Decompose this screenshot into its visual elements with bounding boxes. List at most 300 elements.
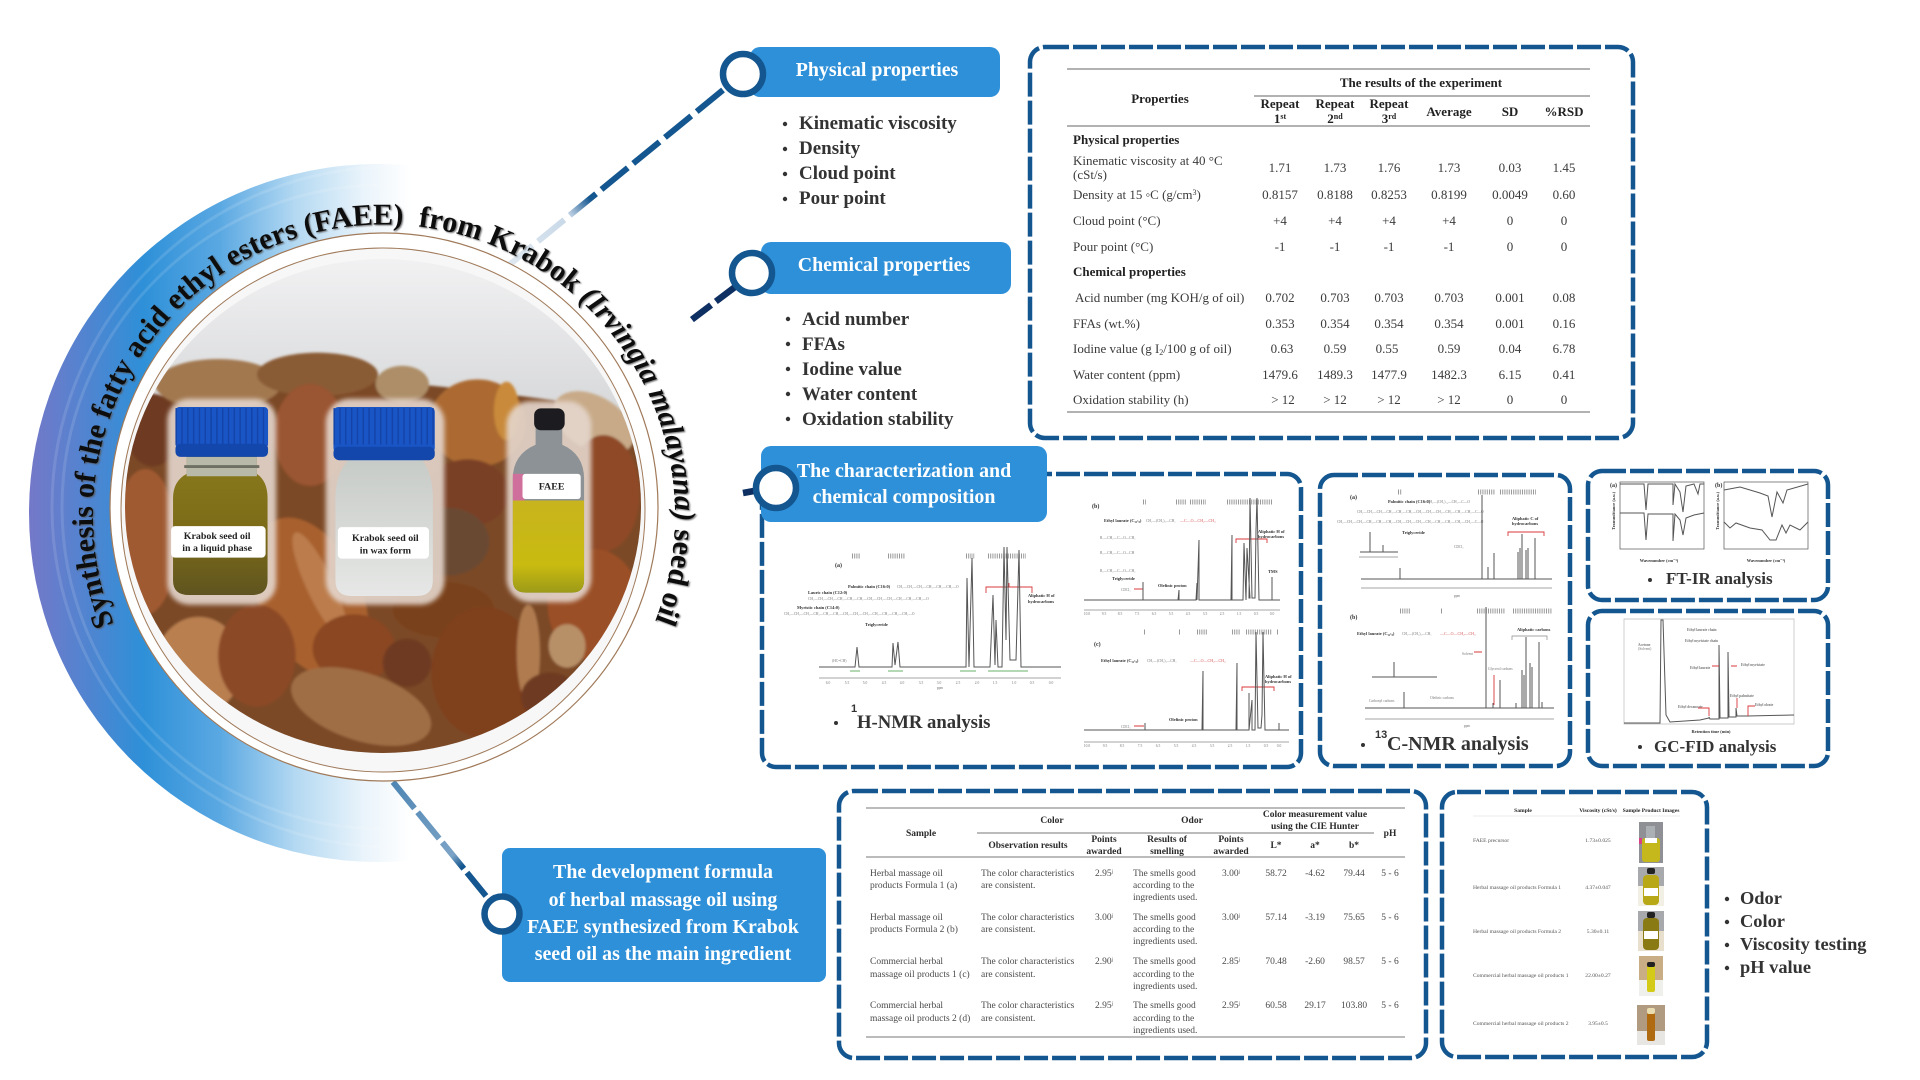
chart: 1H-NMR spectrum c: Olefinic proton [1169,717,1198,722]
chart: GC-FID chromatogram: Ethyl oleate [1755,703,1774,707]
chart: 1H-NMR spectrum c: 2.5 [1228,744,1232,748]
table: experiment results: 1.76 [1378,160,1401,175]
panel: 13C-NMR spectra [1320,475,1570,766]
chart: 1H-NMR spectrum a: CH₃—CH₂—CH₂—CH₂—CH₂—CH₂—CH₂—CH₂—CH₂—CH₂—CH₂—CH₂—O [808,597,929,601]
table: product evaluation: j [1111,958,1113,963]
table: experiment results: 0.354 [1434,316,1464,331]
table: experiment results: 0 [1507,213,1513,228]
table: experiment results: SD [1502,104,1518,119]
table: product evaluation: 3.00 [1222,913,1239,923]
curved title: Synthesis of the fatty acid ethyl esters (FAEE) from Krabok (Irvingia malayana) seed oil [72,204,698,630]
table: product evaluation: a* [1310,841,1320,851]
table: experiment results [1067,69,1590,412]
table: experiment results: /100 g of oil) [1163,341,1232,356]
list: physical properties: Kinematic viscosity [799,113,957,134]
panel: sensory and colour table [839,791,1426,1058]
table: experiment results: -1 [1330,239,1340,254]
table: experiment results: 0.55 [1376,341,1398,356]
table: product evaluation: 5 - 6 [1381,913,1399,923]
chart: GC-FID chromatogram: Ethyl myristate [1741,663,1765,667]
table: experiment results: 0.8199 [1431,187,1467,202]
chart: 1H-NMR spectrum c: 3.5 [1210,744,1214,748]
chart: 13C-NMR spectrum a: hydrocarbons [1512,521,1538,526]
table: product evaluation: 5 - 6 [1381,869,1399,879]
text: GC-FID label: GC-FID analysis [1654,737,1777,756]
table: viscosity: Herbal massage oil products Formula 2 [1473,929,1561,935]
table: product evaluation: massage oil products 1 (c) [870,969,970,980]
chart: 1H-NMR spectrum a [784,547,1061,690]
list: product tests: Viscosity testing [1740,934,1867,954]
table: experiment results: 3 [1192,188,1196,197]
chart: 13C-NMR spectrum b: (b) [1350,614,1357,621]
table: product evaluation: ingredients used. [1133,982,1197,992]
jar: wax seed oil: in wax form [360,545,412,556]
photo: krabok seeds and three bottles [125,273,641,753]
list: physical properties: Cloud point [799,163,896,184]
table: product evaluation: The color characteristics [981,1001,1075,1011]
panel: FT-IR [1588,471,1828,600]
table: product evaluation: massage oil products 2 (d) [870,1013,970,1024]
chart: 1H-NMR spectrum a: Triglyceride [865,622,888,627]
table: experiment results: Cloud point (°C) [1073,213,1161,228]
chart: 13C-NMR spectrum b: ppm [1464,724,1470,728]
table: experiment results: %RSD [1544,104,1584,119]
panel: massage oil formula heading: seed oil as the main ingredient [535,943,792,965]
table: experiment results: (cSt/s) [1073,167,1107,182]
table: product evaluation: The color characteristics [981,957,1075,967]
table: product evaluation: 60.58 [1265,1001,1287,1011]
table: product evaluation: The color characteristics [981,913,1075,923]
chart: 1H-NMR spectrum c: CH₃—(CH₂)₉—CH₂ [1147,659,1177,663]
table: experiment results: Physical properties [1073,132,1179,147]
chart: 1H-NMR spectrum b: R₁—CH₂—C—O—CH₂ [1100,536,1136,540]
list: product tests: Odor [1740,888,1782,908]
table: product evaluation [866,808,1405,1037]
chart: 13C-NMR spectrum b [1350,607,1554,728]
table: experiment results: Average [1426,104,1472,119]
table: product evaluation: 5 - 6 [1381,1001,1399,1011]
chart: 13C-NMR spectrum b: Glycerol carbons [1488,667,1513,671]
panel: physical properties heading [723,47,1000,97]
table: experiment results: nd [1334,112,1343,121]
chart: 13C-NMR spectrum b: —C—O—CH₂—CH₃ [1439,631,1476,636]
table: experiment results: The results of the experiment [1340,75,1503,90]
chart: GC-FID chromatogram: Ethyl laurate chain [1687,628,1717,632]
table: product evaluation: ingredients used. [1133,893,1197,903]
icon: ring marker [484,896,520,932]
table: viscosity: 4.37±0.047 [1585,885,1611,891]
connector: to massage oil formula [393,782,486,896]
chart: 1H-NMR spectrum a: 4.0 [900,681,904,685]
table: experiment results: 0.353 [1265,316,1295,331]
table: experiment results: 0 [1507,239,1513,254]
table: product evaluation: according to the [1133,881,1194,891]
chart: 1H-NMR spectrum a: Lauric chain (C12:0) [808,590,848,595]
images: sample bottles [1637,822,1665,1045]
chart: 13C-NMR spectrum a: CH₃—CH₂—CH₂—CH₂—CH₂—CH₂—CH₂—CH₂—CH₂—CH₂—CH₂—CH₂—C—O [1357,510,1484,514]
table: experiment results: Iodine value (g I [1073,341,1159,356]
table: experiment results: FFAs (wt.%) [1073,316,1140,331]
jar: liquid seed oil: in a liquid phase [182,543,253,554]
chart: 1H-NMR spectrum a: 6.0 [826,681,830,685]
table: viscosity: 3.95±0.5 [1588,1021,1608,1027]
list: chemical properties: FFAs [802,334,845,355]
chart: 1H-NMR spectrum c: 10.0 [1084,744,1090,748]
table: product evaluation: Color [1040,816,1064,826]
chart: 13C-NMR spectrum a [1337,492,1552,598]
table: product evaluation: 5 - 6 [1381,957,1399,967]
table: experiment results: +4 [1442,213,1456,228]
chart: 1H-NMR spectrum b: R₃—CH₂—C—O—CH₂ [1100,569,1136,573]
table: experiment results: 1.71 [1269,160,1291,175]
table: experiment results: 0.354 [1320,316,1350,331]
chart: 1H-NMR spectrum b: 0.0 [1270,612,1274,616]
list: product tests: Color [1740,911,1785,931]
table: experiment results: 0.001 [1495,316,1525,331]
table: experiment results: Chemical properties [1073,264,1186,279]
table: experiment results: 6.78 [1553,341,1575,356]
chart: 13C-NMR spectrum b: CH₃—(CH₂)₉—CH₂ [1402,632,1432,636]
table: product evaluation: 57.14 [1265,913,1287,923]
chart: 13C-NMR spectrum b: Carbonyl carbons [1369,699,1395,703]
table: product evaluation: Observation results [988,841,1068,851]
panel: viscosity table with product images [1442,792,1707,1057]
chart: 1H-NMR spectrum a: 1.5 [993,681,997,685]
chart: GC-FID chromatogram: Retention time (min) [1691,729,1731,734]
panel: massage oil formula heading: of herbal massage oil using [549,889,777,911]
text: 1H-NMR label [834,703,990,733]
chart: FT-IR spectra: (b) [1715,482,1722,489]
chart: 1H-NMR spectrum b: 6.5 [1152,612,1156,616]
table: product evaluation: j [1238,1002,1240,1007]
chart: 13C-NMR spectrum a: CH₃—(CH₂)₁₄—CH₂—C—O [1427,500,1470,504]
list: physical properties [783,113,957,209]
table: experiment results: 0.63 [1271,341,1293,356]
chart: 13C-NMR spectrum a: Triglyceride [1402,530,1425,535]
table: experiment results: Density at 15 ◦C (g/cm [1073,187,1192,202]
table: experiment results: 1489.3 [1317,367,1353,382]
chart: 13C-NMR spectrum a: ppm [1454,594,1460,598]
table: product evaluation: 79.44 [1343,869,1365,879]
chart: 1H-NMR spectrum c: (c) [1094,641,1101,648]
chart: 1H-NMR spectrum a: Myristic chain (C14:0) [797,605,840,610]
chart: 13C-NMR spectrum b: Aliphatic carbons [1517,627,1551,632]
chart: 1H-NMR spectrum a: 2.5 [956,681,960,685]
table: experiment results: ) [1196,187,1201,202]
chart: 1H-NMR spectrum b: Ethyl laurate (C₁₂:₀) [1104,518,1142,523]
table: experiment results: > 12 [1271,392,1295,407]
table: experiment results: Properties [1131,91,1189,106]
table: experiment results: 0.41 [1553,367,1575,382]
table: product evaluation: are consistent. [981,925,1035,935]
table: product evaluation: are consistent. [981,881,1035,891]
table: experiment results: 3 [1382,111,1388,126]
icon: ring marker [723,54,763,94]
table: experiment results: 1479.6 [1262,367,1298,382]
chart: FT-IR spectra: Transmittance (a.u.) [1715,491,1720,530]
chart: 1H-NMR spectrum c: 0.5 [1264,744,1268,748]
table: product evaluation: products Formula 2 (b) [870,924,958,935]
table: product evaluation: 29.17 [1304,1001,1326,1011]
chart: 1H-NMR spectrum a: 0.0 [1049,681,1053,685]
table: viscosity: Commercial herbal massage oil products 1 [1473,973,1569,979]
chart: 1H-NMR spectrum c: 8.5 [1120,744,1124,748]
table: experiment results: 0 [1507,392,1513,407]
list: product tests: pH value [1740,957,1811,977]
table: product evaluation: 2.95 [1095,869,1112,879]
chart: 1H-NMR spectrum a: 1.0 [1012,681,1016,685]
table: product evaluation: j [1238,958,1240,963]
table: experiment results: +4 [1382,213,1396,228]
chart: 1H-NMR spectrum a: CH₃—CH₂—CH₂—CH₂—CH₂—CH₂—CH₂—CH₂—CH₂—CH₂—CH₂—CH₂—CH₂—O [784,612,915,616]
list: physical properties: Pour point [799,188,886,209]
table: product evaluation: L* [1270,841,1282,851]
table: product evaluation: according to the [1133,970,1194,980]
chart: 1H-NMR spectrum b: hydrocarbons [1258,534,1284,539]
chart: 13C-NMR spectrum a: Aliphatic C of [1512,516,1539,521]
table: experiment results: 0.001 [1495,290,1525,305]
table: product evaluation: 2.90 [1095,957,1112,967]
chart: 1H-NMR spectrum b: —C—O—CH₂—CH₃ [1179,518,1216,523]
chart: 1H-NMR spectrum a: 4.5 [882,681,886,685]
chart: 1H-NMR spectrum b: TMS [1268,569,1278,574]
chart: 1H-NMR spectrum b: CH₃—(CH₂)₉—CH₂ [1146,519,1176,523]
chart: 1H-NMR spectrum a: Aliphatic H of [1028,593,1055,598]
chart: 1H-NMR spectrum b: 7.5 [1135,612,1139,616]
chart: 1H-NMR spectrum c: 7.5 [1138,744,1142,748]
table: product evaluation: Commercial herbal [870,1001,943,1011]
table: experiment results: 0.59 [1438,341,1460,356]
chart: 1H-NMR spectrum b: 1.5 [1237,612,1241,616]
chart: 1H-NMR spectrum a: CH₃—CH₂—CH₂—CH₂—CH₂—CH₂—O [897,585,959,589]
chart: 13C-NMR spectrum a: CH₃—CH₂—CH₂—CH₂—CH₂—CH₂—CH₂—CH₂—CH₂—CH₂—CH₂—CH₂—CH₂—CH₂—C—O [1337,520,1484,524]
table: product evaluation: Sample [906,829,936,839]
table: product evaluation: according to the [1133,925,1194,935]
chart: FT-IR spectra: Wavenumber (cm⁻¹) [1747,558,1786,563]
chart: 1H-NMR spectrum c: 5.5 [1174,744,1178,748]
table: viscosity: Commercial herbal massage oil products 2 [1473,1021,1569,1027]
table: experiment results: 1.73 [1438,160,1460,175]
bottle: FAEE: FAEE [539,481,565,492]
chart: 1H-NMR spectrum c: Aliphatic H of [1265,674,1292,679]
table: product evaluation: The smells good [1133,869,1196,879]
table: product evaluation: are consistent. [981,1014,1035,1024]
table: product evaluation: -2.60 [1305,957,1325,967]
chart: 1H-NMR spectrum b: Aliphatic H of [1258,529,1285,534]
chart: 1H-NMR spectrum a: hydrocarbons [1028,599,1054,604]
table: experiment results: Pour point (°C) [1073,239,1153,254]
table: experiment results: +4 [1328,213,1342,228]
table: product evaluation: using the CIE Hunter [1271,822,1360,832]
chart: 1H-NMR spectrum b [1084,498,1285,616]
connector: to characterization [743,491,754,493]
chart: 1H-NMR spectrum b: CDCl₃ [1121,588,1131,592]
table: product evaluation: Points [1091,835,1117,845]
table: experiment results: -1 [1275,239,1285,254]
panel: GC-FID [1588,611,1828,766]
panel: chemical properties heading [732,242,1011,294]
table: product evaluation: j [1111,1002,1113,1007]
table: product evaluation: Herbal massage oil [870,913,943,923]
text: FT-IR label: FT-IR analysis [1666,569,1773,588]
chart: 1H-NMR spectrum b: R₂—CH₂—C—O—CH [1100,551,1135,555]
table: product evaluation: 103.80 [1341,1001,1367,1011]
chart: 1H-NMR spectrum c: 4.5 [1192,744,1196,748]
table: product evaluation: are consistent. [981,970,1035,980]
panel: physical properties heading: Physical properties [796,59,959,81]
table: product evaluation: The color characteristics [981,869,1075,879]
table: experiment results: 0.0049 [1492,187,1528,202]
table: product evaluation: Odor [1181,816,1204,826]
text: 1H-NMR label: H-NMR analysis [857,712,990,733]
table: product evaluation: 58.72 [1265,869,1287,879]
table: experiment results: 0.08 [1553,290,1575,305]
table: product evaluation: 3.00 [1095,913,1112,923]
list: chemical properties: Iodine value [802,359,902,380]
panel: massage oil formula heading [484,848,826,982]
chart: 1H-NMR spectrum b: 3.5 [1203,612,1207,616]
table: experiment results: 1482.3 [1431,367,1467,382]
table: experiment results: 0.354 [1374,316,1404,331]
table: product evaluation: Points [1218,835,1244,845]
chart: 1H-NMR spectrum c: hydrocarbons [1265,679,1291,684]
table: viscosity: 22.00±0.27 [1585,973,1611,979]
text: 13C-NMR label: C-NMR analysis [1387,733,1529,755]
chart: 13C-NMR spectrum b: Ethyl laurate (C₁₂:₀) [1357,631,1395,636]
chart: 1H-NMR spectrum b: 4.5 [1186,612,1190,616]
connector: to physical properties [509,90,723,265]
table: experiment results: 0.16 [1553,316,1576,331]
table: experiment results: 1.45 [1553,160,1575,175]
list: chemical properties: Water content [802,384,918,405]
table: viscosity: Herbal massage oil products Formula 1 [1473,885,1561,891]
table: product evaluation: according to the [1133,1014,1194,1024]
chart: 1H-NMR spectrum a: 0.5 [1030,681,1034,685]
icon: ring marker [732,253,772,293]
table: product evaluation: j [1238,870,1240,875]
table: product evaluation: Commercial herbal [870,957,943,967]
table: viscosity: FAEE precursor [1473,838,1509,844]
chart: 1H-NMR spectrum a: (HC=CH) [832,659,847,663]
table: experiment results: 0.8188 [1317,187,1353,202]
list: chemical properties [786,309,954,430]
table: experiment results: 0 [1561,213,1567,228]
blue crescent behind the photo [29,164,392,862]
chart: GC-FID chromatogram: Ethyl laurate [1690,666,1711,670]
list: physical properties: Density [799,138,861,159]
table: product evaluation: products Formula 1 (a) [870,880,957,891]
central photo disc [110,233,658,799]
table: product evaluation: j [1111,914,1113,919]
table: experiment results: 2 [1159,348,1163,357]
table: experiment results: 0.702 [1265,290,1295,305]
table: experiment results: Oxidation stability (h) [1073,392,1189,407]
table: product evaluation: j [1111,870,1113,875]
table: experiment results: > 12 [1437,392,1461,407]
chart: 13C-NMR spectrum a: (a) [1350,494,1357,501]
panel: massage oil formula heading: The development formula [553,861,773,883]
chart: 1H-NMR spectrum b: 5.5 [1169,612,1173,616]
chart: GC-FID chromatogram: (Solvent) [1638,647,1652,651]
table: experiment results: -1 [1384,239,1394,254]
table: viscosity: 1.73±0.025 [1585,838,1611,844]
chart: 13C-NMR spectrum a: Palmitic chain (C16:0) [1388,499,1431,504]
chart: 1H-NMR spectrum b: 10.0 [1084,612,1090,616]
table: viscosity: 5.30±0.11 [1587,929,1609,935]
chart: GC-FID chromatogram: Ethyl decanoate [1678,705,1703,709]
table: experiment results: > 12 [1377,392,1401,407]
chart: 1H-NMR spectrum c: 1.5 [1246,744,1250,748]
chart: 1H-NMR spectrum c: CDCl₃ [1121,725,1131,729]
panel: characterization heading [756,446,1047,522]
chart: 1H-NMR spectrum a: 3.5 [919,681,923,685]
chart: 1H-NMR spectrum b: Triglyceride [1112,576,1135,581]
table: product evaluation: 98.57 [1343,957,1365,967]
table: experiment results: 1477.9 [1371,367,1407,382]
table: experiment results: Repeat [1260,96,1300,111]
table: experiment results: st [1280,112,1286,121]
table: experiment results: 1 [1274,111,1280,126]
panel: results table [1030,47,1633,438]
panel: 1H-NMR spectra [762,474,1301,767]
table: product evaluation: 2.85 [1222,957,1239,967]
chart: 1H-NMR spectrum b: (b) [1092,503,1099,510]
table: product evaluation: The smells good [1133,913,1196,923]
table: viscosity: Sample [1514,808,1532,814]
chart: 1H-NMR spectrum c: —C—O—CH₂—CH₃ [1189,658,1226,663]
table: viscosity: Viscosity (cSt/s) [1579,807,1617,814]
table: experiment results: +4 [1273,213,1287,228]
list: chemical properties: Acid number [802,309,910,330]
text: 1H-NMR label: 1 [851,703,857,715]
bottle: FAEE [513,408,584,593]
chart: 1H-NMR spectrum b: 0.5 [1254,612,1258,616]
table: product evaluation: 3.00 [1222,869,1239,879]
table: product evaluation: 2.95 [1222,1001,1239,1011]
table: product evaluation: -4.62 [1305,869,1325,879]
chart: 1H-NMR spectrum c: 9.5 [1103,744,1107,748]
jar: wax seed oil [333,407,435,596]
chart: 1H-NMR spectrum a: ppm [937,686,943,690]
table: experiment results: 0 [1561,239,1567,254]
table: product evaluation: Herbal massage oil [870,869,943,879]
table: experiment results: Water content (ppm) [1073,367,1180,382]
panel: massage oil formula heading: FAEE synthesized from Krabok [527,916,800,938]
table: product evaluation: 2.95 [1095,1001,1112,1011]
text: 13C-NMR label: 13 [1375,729,1387,741]
chart: GC-FID chromatogram: Ethyl myristate chain [1685,639,1718,643]
table: experiment results: 0.04 [1499,341,1522,356]
chart: 1H-NMR spectrum b: Olefinic proton [1158,583,1187,588]
chart: 1H-NMR spectrum b: 2.5 [1220,612,1224,616]
chart: 1H-NMR spectrum a: 5.5 [845,681,849,685]
table: experiment results: Repeat [1370,96,1409,111]
table: experiment results: 0.60 [1553,187,1575,202]
icon: ring marker [756,468,796,508]
chart: FT-IR spectra: (a) [1610,482,1617,489]
table: experiment results: 2 [1327,111,1334,126]
list: chemical properties: Oxidation stability [802,409,954,430]
chart: 1H-NMR spectrum c: 0.0 [1277,744,1281,748]
chart: 1H-NMR spectrum c: 6.5 [1156,744,1160,748]
table: product evaluation: ingredients used. [1133,1026,1197,1036]
table: product evaluation: awarded [1213,847,1249,857]
table: experiment results: 0.59 [1324,341,1346,356]
table: product evaluation: smelling [1150,847,1184,857]
chart: GC-FID chromatogram: Acetone [1638,643,1651,647]
table: product evaluation: Results of [1147,835,1188,845]
table: experiment results: 0 [1561,392,1567,407]
